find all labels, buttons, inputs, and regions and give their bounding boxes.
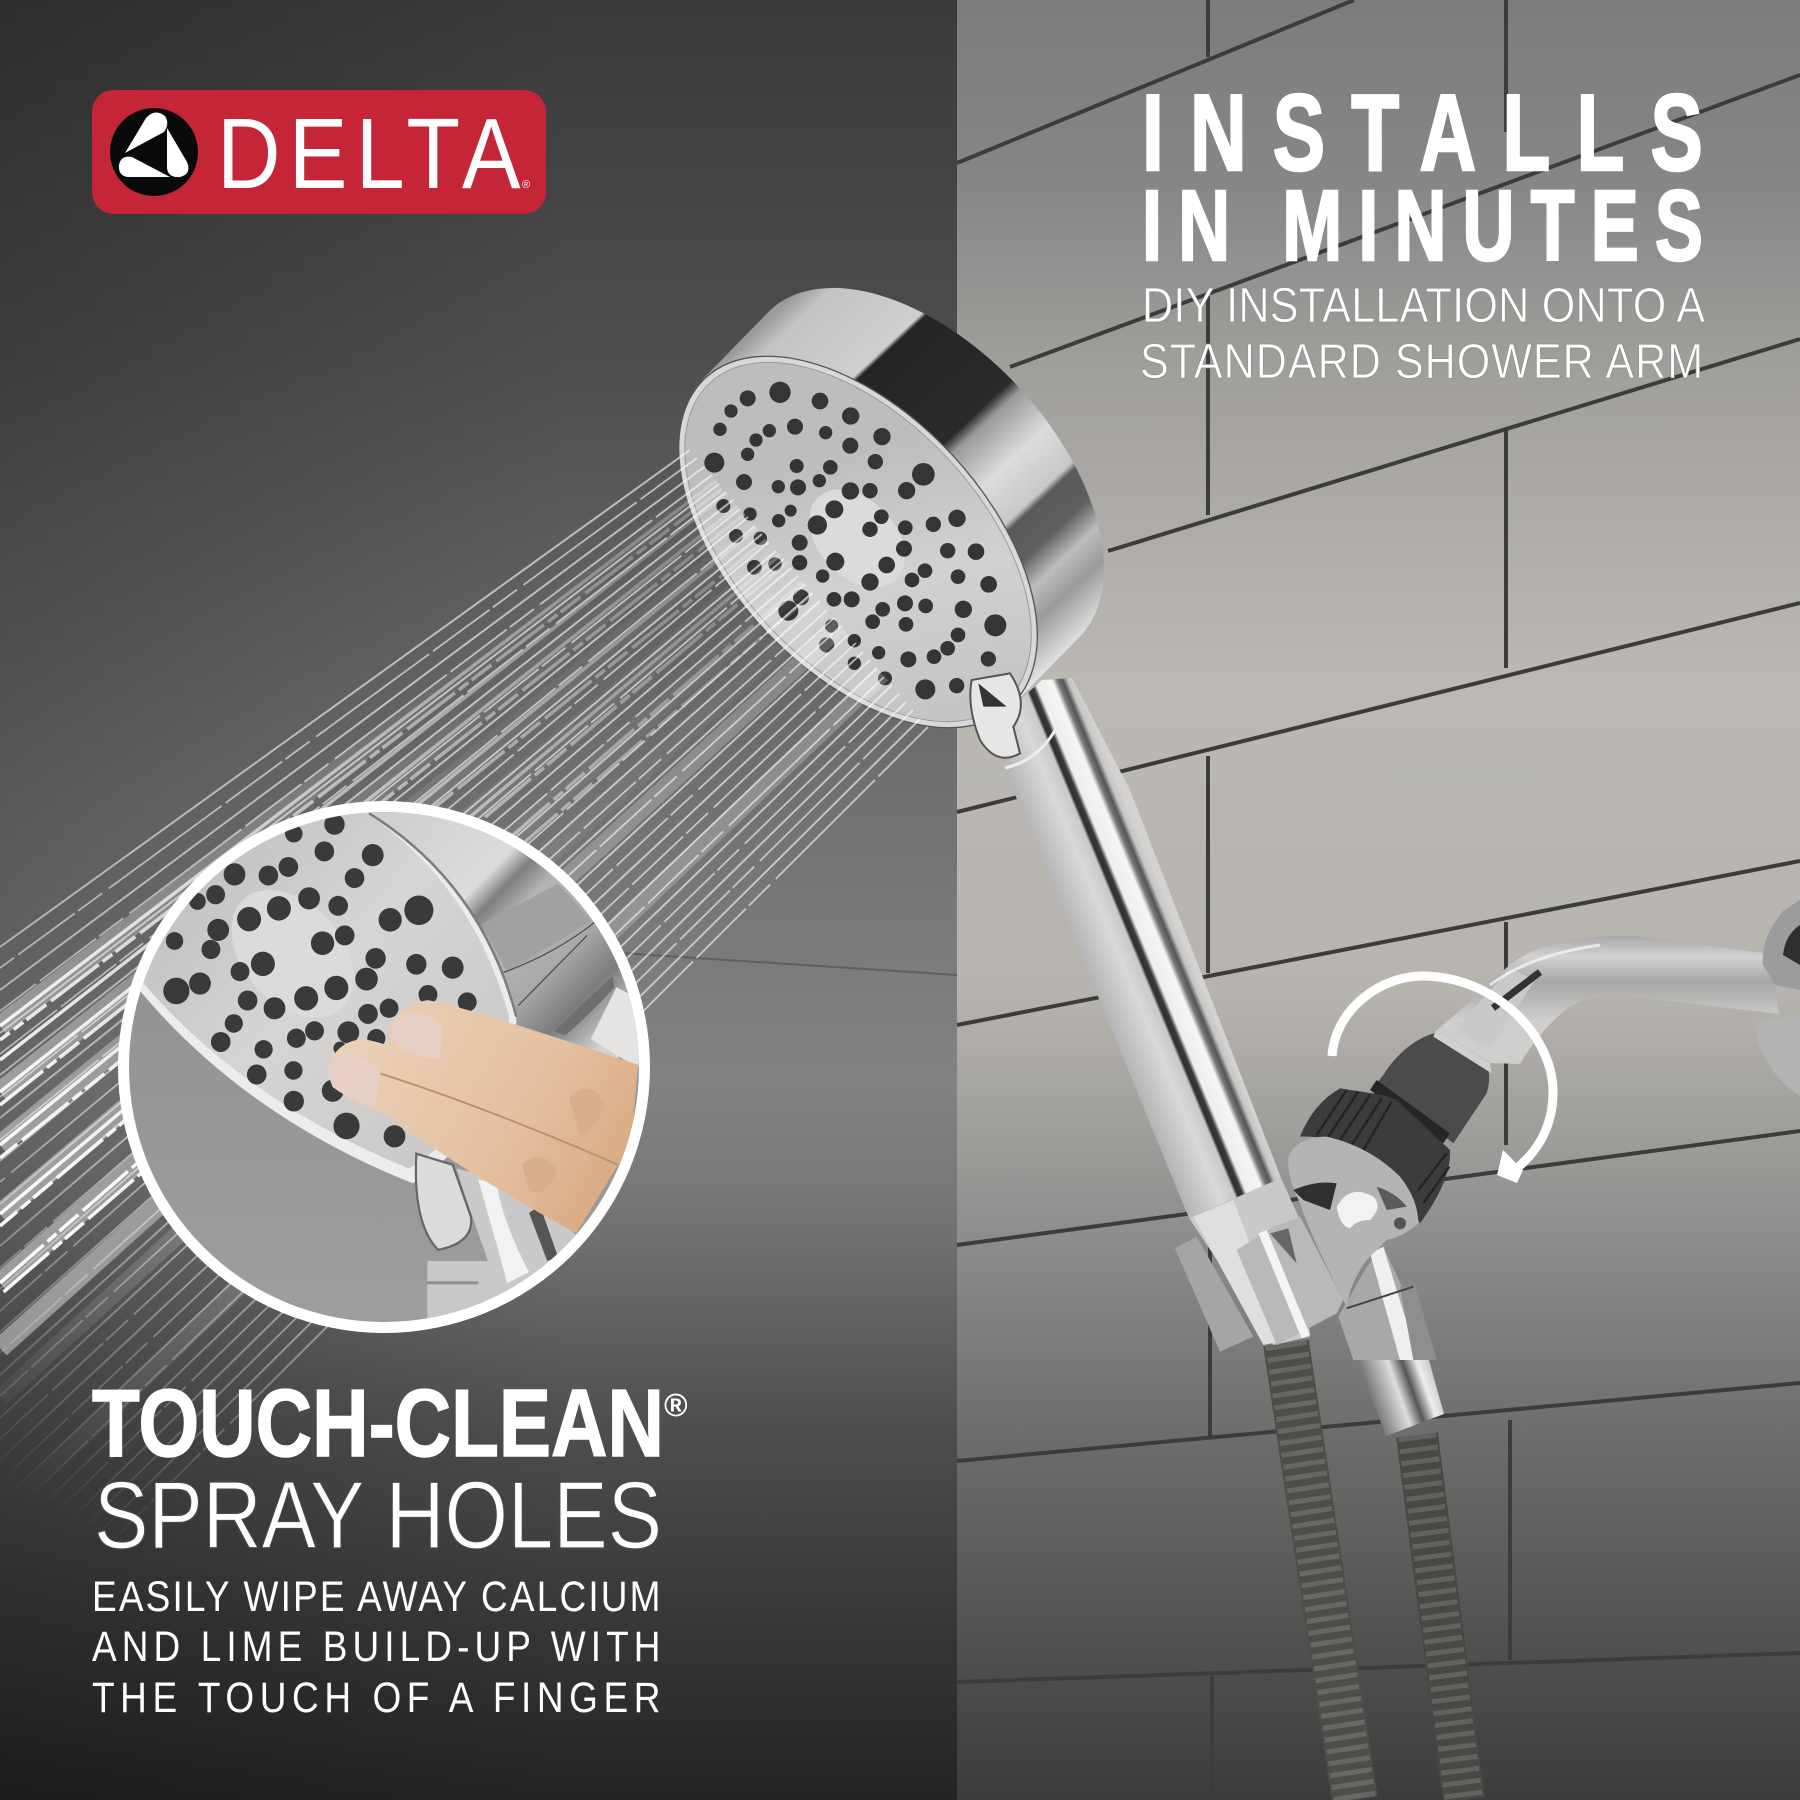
heading: installs in minutes	[1142, 72, 1703, 282]
inset: fingers	[327, 1000, 638, 1233]
holder pipe	[1338, 1247, 1437, 1360]
text: DIY installation: DIY INSTALLATION ONTO A	[1142, 277, 1705, 333]
inset: finger wiping spray holes	[118, 801, 650, 1333]
logo registered mark: ®	[522, 179, 530, 191]
inset: selector clip and handle	[416, 1154, 580, 1294]
water streams	[0, 450, 928, 1653]
upper nut	[1370, 1030, 1492, 1143]
holder back plate	[1175, 1237, 1253, 1352]
hose: rear	[1417, 1435, 1464, 1800]
holder collar	[1189, 1178, 1310, 1345]
inset: spray face	[140, 812, 518, 1184]
chrome swivel ball	[1288, 1137, 1418, 1307]
head chrome body	[702, 288, 1104, 704]
logo emblem	[110, 108, 198, 196]
rotate arrow	[1332, 976, 1553, 1183]
head spray face	[611, 291, 1105, 793]
heading: installs in minutes: IN MINUTES	[1142, 170, 1703, 282]
shower head	[611, 288, 1105, 793]
holder front plate	[1237, 1217, 1343, 1345]
logo wordmark: DELTA	[217, 98, 521, 209]
panel: tiled wall	[957, 0, 1800, 1800]
inset: tile reflection	[427, 1261, 500, 1318]
heading: touch-clean spray holes: ®	[664, 1387, 688, 1423]
lower hose pipe	[1341, 1286, 1444, 1436]
spray selector clip	[970, 673, 1021, 758]
heading: touch-clean spray holes: TOUCH-CLEAN	[92, 1370, 664, 1477]
heading: touch-clean spray holes	[92, 1370, 688, 1569]
inset: spray holes	[163, 814, 477, 1147]
shower arm	[1437, 900, 1800, 1096]
hose: front	[1286, 1343, 1355, 1800]
text: wipe away description: EASILY WIPE AWAY CALCIUM	[92, 1573, 660, 1621]
text: DIY installation: STANDARD SHOWER ARM	[1140, 333, 1703, 389]
inset: chrome body	[369, 812, 639, 1068]
text: DIY installation	[1140, 277, 1705, 389]
heading: installs in minutes: INSTALLS	[1142, 72, 1703, 194]
spray holes	[704, 382, 1006, 699]
text: wipe away description: THE TOUCH OF A FINGER	[92, 1674, 660, 1722]
panel: dark gradient background	[0, 0, 957, 1800]
text: wipe away description: AND LIME BUILD-UP WITH	[92, 1623, 660, 1671]
large ribbed nut	[1300, 1088, 1450, 1223]
logo: Delta badge	[92, 90, 546, 214]
swivel mount and holder	[1175, 1030, 1492, 1360]
heading: touch-clean spray holes: SPRAY HOLES	[94, 1462, 662, 1569]
text: wipe away description	[92, 1573, 660, 1722]
shower handle	[1005, 678, 1281, 1218]
